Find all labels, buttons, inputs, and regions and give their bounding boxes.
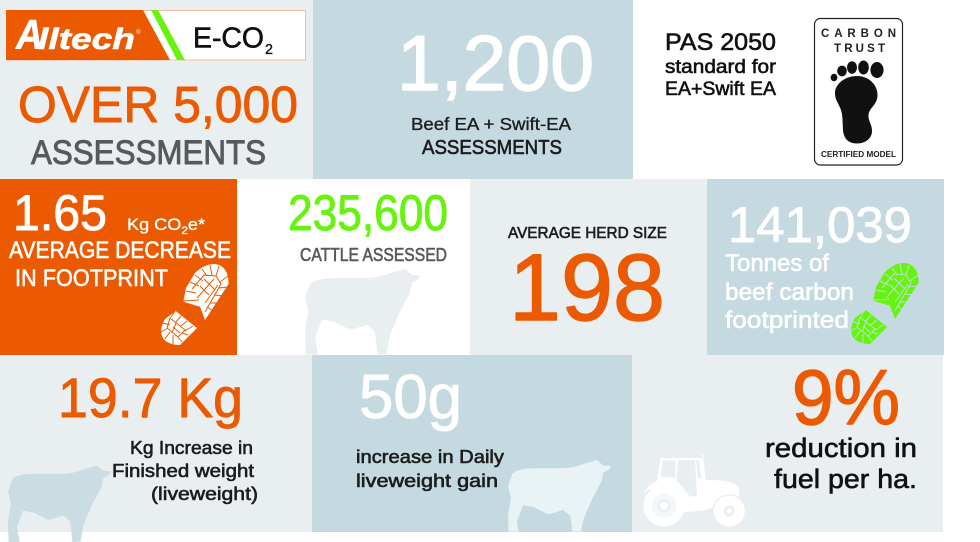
label: increase in daily liveweight gain: increase in Daily	[356, 446, 505, 467]
label: tonnes of beef carbon footprinted: Tonnes of	[725, 250, 829, 277]
unit: kg CO2e: e*	[188, 215, 205, 234]
panel: tonnes of beef	[707, 179, 944, 355]
heading: over 5,000: OVER 5,000	[18, 76, 298, 133]
label: tonnes of beef carbon footprinted: beef carbon	[725, 279, 854, 306]
text: PAS 2050: PAS 2050	[665, 29, 776, 56]
panel: average decrease in footprint	[0, 179, 237, 355]
stat: 50g: 50g	[359, 363, 462, 432]
text: PAS 2050	[665, 29, 777, 100]
label: kg increase in finished weight	[112, 437, 258, 504]
unit: kg CO2e: 2	[181, 225, 188, 237]
icon: cow silhouette	[508, 460, 611, 532]
label: in footprint: IN FOOTPRINT	[15, 265, 168, 292]
label: kg increase in finished weight: Kg Increase in	[130, 437, 253, 458]
icon: carbon trust badge: TRUST	[834, 43, 885, 55]
icon: carbon trust badge: CARBON	[821, 28, 896, 40]
unit: kg CO2e: Kg CO	[127, 215, 178, 234]
logo: Alltech E-CO2: lltech	[38, 23, 135, 56]
icon: white boot print	[161, 264, 229, 345]
stat: 19.7 kg: 19.7 Kg	[58, 366, 243, 429]
logo: Alltech E-CO2	[6, 10, 306, 60]
stat: 1,200: 1,200	[397, 19, 594, 107]
logo: Alltech E-CO2: A	[15, 11, 43, 58]
text: PAS 2050: EA+Swift EA	[665, 78, 776, 100]
label: reduction in fuel per ha	[765, 433, 917, 494]
panel: daily liveweight gain	[312, 355, 632, 532]
label: tonnes of beef carbon footprinted: footprinted	[725, 307, 849, 334]
panel: 1,200 beef assessments	[313, 0, 633, 179]
label: assessments: ASSESSMENTS	[422, 137, 562, 159]
panel: cattle assessed	[237, 179, 470, 355]
label: average decrease: AVERAGE DECREASE	[9, 237, 231, 264]
stat: 1.65: 1.65	[13, 185, 107, 241]
stat: 198: 198	[509, 235, 665, 341]
label: increase in daily liveweight gain	[356, 446, 505, 491]
stat: 141,039: 141,039	[728, 197, 912, 253]
icon: cow silhouette	[8, 466, 111, 542]
logo: Alltech E-CO2: ®	[136, 29, 141, 36]
panel: average herd size	[470, 179, 707, 355]
icon: green boot print	[851, 263, 919, 344]
stat: 235,600: 235,600	[288, 185, 448, 241]
label: average herd size: AVERAGE HERD SIZE	[508, 225, 667, 242]
label: beef EA: Beef EA + Swift-EA	[411, 114, 571, 134]
text: PAS 2050: standard for	[665, 56, 777, 78]
panel: PAS 2050 standard	[665, 18, 902, 165]
icon: tractor	[643, 454, 746, 528]
icon: carbon trust badge: CERTIFIED MODEL	[821, 150, 896, 159]
label: reduction in fuel per ha: reduction in	[765, 433, 917, 463]
stat: 9%: 9%	[792, 353, 900, 441]
icon: carbon trust badge	[814, 18, 902, 165]
label: cattle assessed: CATTLE ASSESSED	[300, 244, 447, 265]
icon: cow silhouette	[305, 269, 421, 355]
logo: Alltech E-CO2: E-CO	[193, 22, 264, 54]
label: kg increase in finished weight: Finished weight	[112, 460, 254, 481]
panel: total assessments	[0, 0, 313, 179]
label: increase in daily liveweight gain: liveweight gain	[356, 470, 498, 491]
label: reduction in fuel per ha: fuel per ha.	[774, 464, 917, 494]
label: tonnes of beef carbon footprinted	[725, 250, 854, 334]
label: kg increase in finished weight: (liveweight)	[151, 483, 258, 504]
panel: finished weight	[0, 355, 312, 532]
subheading: assessments: ASSESSMENTS	[31, 134, 266, 172]
logo: Alltech E-CO2: 2	[265, 41, 273, 58]
panel: fuel reduction	[632, 353, 943, 532]
